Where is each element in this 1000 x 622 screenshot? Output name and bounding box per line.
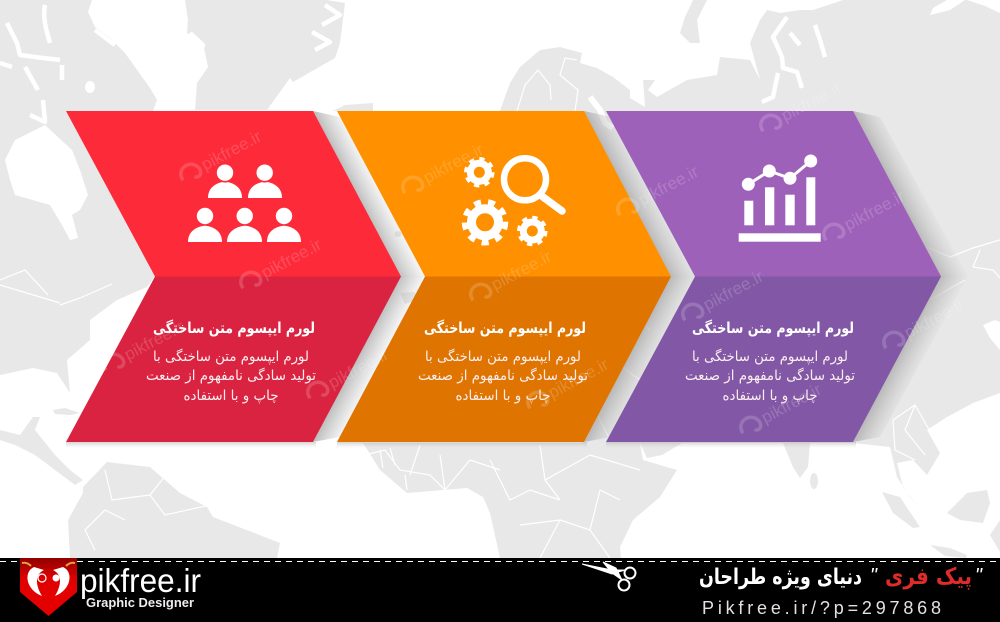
step 1 heading: لورم ایپسوم متن ساختگی [153, 319, 315, 338]
step 3 heading: لورم ایپسوم متن ساختگی [692, 319, 854, 338]
step 2 body text: تولید سادگی نامفهوم از صنعت [418, 367, 588, 384]
footer slogan: " [975, 565, 983, 587]
step 2 heading: لورم ایپسوم متن ساختگی [424, 319, 586, 338]
chevron 1 upper face [66, 111, 401, 276]
watermarks: pikfree.ir [488, 247, 555, 294]
icon: bar and line chart [739, 154, 821, 242]
chevron 3 upper face [606, 111, 941, 276]
watermarks: pikfree.ir [758, 380, 825, 427]
panel: step 2 orange chevron [337, 111, 699, 448]
watermarks: pikfree.ir [198, 127, 265, 174]
icon: gears and magnifier [465, 158, 562, 244]
logo wordmark: pikfree.ir [80, 562, 201, 599]
footer url: Pikfree.ir/?p=297868 [702, 598, 941, 618]
watermarks: pikfree.ir [700, 267, 767, 314]
chevron 2 upper face [337, 111, 671, 276]
footer bar [0, 558, 1000, 622]
footer slogan: " [870, 565, 878, 587]
footer slogan: دنیای ویژه طراحان [699, 565, 862, 590]
step 2 body text [418, 348, 588, 404]
footer slogan [699, 564, 983, 590]
watermarks: pikfree.ir [778, 78, 845, 125]
step 1 body text: تولید سادگی نامفهوم از صنعت [146, 367, 316, 384]
watermarks [100, 78, 968, 439]
step 3 body text [685, 348, 855, 404]
step 2 body text: چاپ و با استفاده [456, 388, 550, 404]
watermarks: pikfree.ir [121, 317, 188, 364]
footer slogan: پیک فری [885, 564, 972, 590]
watermarks: pikfree.ir [901, 295, 968, 342]
watermarks: pikfree.ir [545, 355, 612, 402]
watermarks: pikfree.ir [841, 187, 908, 234]
step 1 body text: لورم ایپسوم متن ساختگی با [153, 348, 309, 365]
panel: step 3 purple chevron [606, 111, 968, 448]
chevron 2 shadow [337, 111, 699, 448]
chevron 3 shadow [606, 111, 968, 448]
watermarks: pikfree.ir [420, 140, 487, 187]
icon: scissors [582, 562, 636, 590]
chevron 2 lower face [337, 276, 671, 442]
step 1 body text [146, 348, 316, 404]
step 3 body text: لورم ایپسوم متن ساختگی با [692, 348, 848, 365]
watermarks: pikfree.ir [635, 162, 702, 209]
logo badge with owl [20, 558, 77, 616]
chevron 1 shadow [66, 111, 428, 448]
watermarks: pikfree.ir [258, 235, 325, 282]
step 2 body text: لورم ایپسوم متن ساختگی با [425, 348, 581, 365]
icon: group of people [188, 164, 301, 242]
chevron 3 lower face [606, 276, 941, 442]
step 3 body text: تولید سادگی نامفهوم از صنعت [685, 367, 855, 384]
logo tagline: Graphic Designer [86, 595, 194, 610]
watermarks: pikfree.ir [325, 345, 392, 392]
chevron 1 lower face [66, 276, 401, 442]
step 3 body text: چاپ و با استفاده [722, 388, 818, 404]
panel: step 1 red chevron [66, 111, 428, 448]
step 1 body text: چاپ و با استفاده [184, 388, 278, 404]
